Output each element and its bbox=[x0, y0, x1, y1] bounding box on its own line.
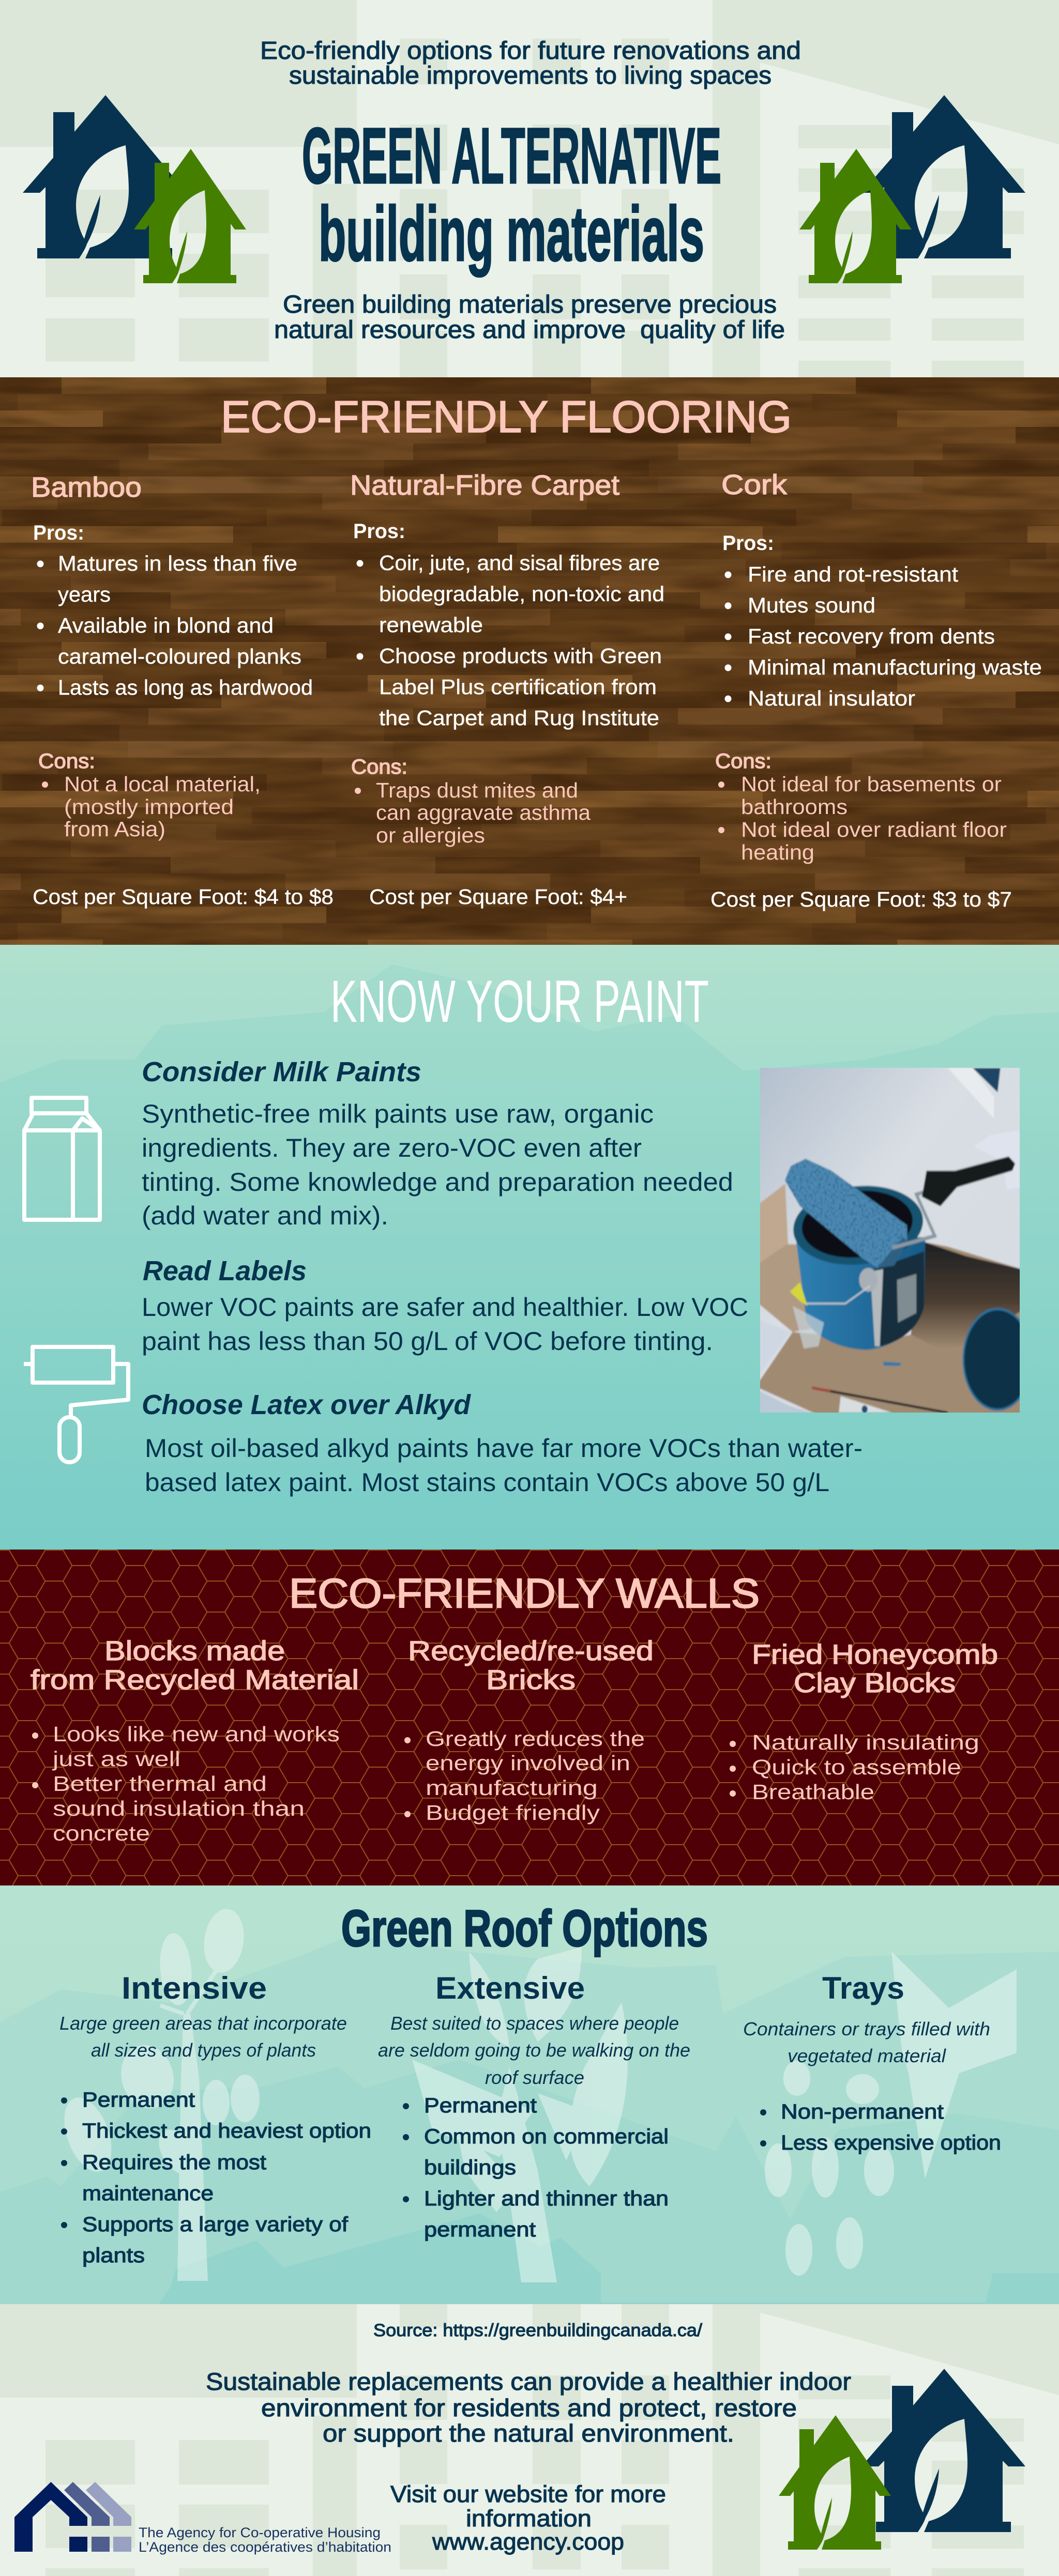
column: cork: Pros: bbox=[722, 532, 774, 555]
column: bamboo: Cost per Square Foot: $4 to $8 bbox=[33, 885, 334, 909]
column: bamboo: (mostly imported bbox=[64, 795, 234, 819]
column: extensive: buildings bbox=[424, 2156, 516, 2179]
block: read labels: Read Labels bbox=[143, 1255, 307, 1286]
panel: paint bbox=[0, 945, 1059, 1550]
column: cork: bathrooms bbox=[741, 795, 848, 819]
block: milk paints: tinting. Some knowledge and preparation needed bbox=[142, 1168, 733, 1197]
column: recycled blocks: concrete bbox=[53, 1821, 150, 1845]
column: natural-fibre carpet: Label Plus certification from bbox=[379, 675, 657, 699]
website call to action: www.agency.coop bbox=[432, 2528, 624, 2555]
column: extensive: Best suited to spaces where people bbox=[390, 2013, 679, 2034]
panel: header bbox=[0, 0, 1059, 377]
closing statement: or support the natural environment. bbox=[323, 2419, 734, 2447]
column: recycled blocks: just as well bbox=[52, 1747, 180, 1771]
website call to action bbox=[390, 2481, 666, 2555]
panel: flooring bbox=[0, 377, 1059, 945]
column: trays: vegetated material bbox=[788, 2045, 946, 2066]
block: read labels: Lower VOC paints are safer and healthier. Low VOC bbox=[142, 1293, 748, 1322]
source line: Source: https://greenbuildingcanada.ca/ bbox=[373, 2321, 703, 2340]
column: recycled bricks bbox=[404, 1636, 654, 1824]
logo: agency for co-operative housing: The Agency for Co-operative Housing bbox=[139, 2525, 381, 2540]
website call to action: information bbox=[466, 2505, 592, 2532]
column: trays bbox=[743, 1971, 1001, 2154]
column: honeycomb clay blocks: Naturally insulating bbox=[752, 1730, 979, 1754]
column: natural-fibre carpet bbox=[350, 470, 664, 909]
column: cork: Not ideal over radiant floor bbox=[741, 818, 1007, 841]
column: recycled blocks: Blocks made bbox=[104, 1636, 285, 1666]
column: cork: Not ideal for basements or bbox=[741, 772, 1002, 796]
column: cork: Mutes sound bbox=[748, 593, 875, 617]
panel: roof bbox=[0, 1885, 1059, 2304]
subtitle bbox=[274, 291, 785, 344]
column: cork: Natural insulator bbox=[748, 686, 915, 710]
column: intensive: Supports a large variety of bbox=[82, 2213, 349, 2236]
heading: paint: KNOW YOUR PAINT bbox=[330, 969, 709, 1035]
column: recycled bricks: Bricks bbox=[486, 1665, 576, 1695]
subtitle: Green building materials preserve precious bbox=[283, 291, 777, 318]
logo: agency for co-operative housing bbox=[14, 2482, 391, 2555]
column: intensive: Thickest and heaviest option bbox=[82, 2120, 371, 2142]
title: building materials bbox=[319, 190, 704, 277]
column: intensive: Permanent bbox=[82, 2089, 195, 2111]
column: honeycomb clay blocks: Quick to assemble bbox=[752, 1755, 961, 1779]
column: intensive: Requires the most bbox=[82, 2151, 266, 2174]
column: natural-fibre carpet: Pros: bbox=[353, 520, 405, 543]
column: natural-fibre carpet: renewable bbox=[379, 613, 483, 637]
column: extensive: are seldom going to be walking on the bbox=[378, 2040, 690, 2061]
block: latex over alkyd: Most oil-based alkyd paints have far more VOCs than water- bbox=[145, 1434, 863, 1463]
column: intensive: all sizes and types of plants bbox=[91, 2040, 316, 2061]
heading: roof: Green Roof Options bbox=[341, 1899, 708, 1957]
closing statement bbox=[206, 2368, 851, 2447]
column: intensive bbox=[59, 1971, 371, 2267]
column: natural-fibre carpet: biodegradable, non-toxic and bbox=[379, 582, 664, 606]
column: recycled blocks: sound insulation than bbox=[53, 1797, 305, 1820]
panel: walls bbox=[0, 1550, 1059, 1885]
column: bamboo: caramel-coloured planks bbox=[58, 645, 301, 668]
column: cork: Cork bbox=[721, 469, 788, 500]
subtitle: natural resources and improve quality of life bbox=[274, 316, 785, 344]
heading: walls: ECO-FRIENDLY WALLS bbox=[289, 1570, 760, 1616]
intro text bbox=[260, 37, 801, 89]
plant: extensive bbox=[412, 1947, 628, 2282]
title bbox=[302, 112, 721, 277]
icon: houses right bbox=[799, 95, 1025, 283]
column: natural-fibre carpet: Choose products with Green bbox=[379, 644, 662, 668]
column: recycled bricks: Greatly reduces the bbox=[426, 1727, 645, 1751]
column: honeycomb clay blocks bbox=[730, 1639, 998, 1804]
column: natural-fibre carpet: Coir, jute, and sisal fibres are bbox=[379, 551, 660, 575]
block: latex over alkyd bbox=[142, 1389, 863, 1497]
column: cork: Fire and rot-resistant bbox=[748, 562, 959, 586]
column: natural-fibre carpet: or allergies bbox=[376, 823, 485, 847]
block: read labels bbox=[142, 1255, 748, 1356]
column: bamboo: Pros: bbox=[33, 522, 84, 544]
column: natural-fibre carpet: Cons: bbox=[351, 756, 407, 778]
plant: intensive bbox=[55, 1906, 260, 2281]
column: bamboo: from Asia) bbox=[64, 817, 165, 841]
icon: houses footer bbox=[779, 2369, 1025, 2550]
column: honeycomb clay blocks: Breathable bbox=[752, 1780, 874, 1804]
column: bamboo: Not a local material, bbox=[64, 772, 261, 796]
panel: footer bbox=[0, 2304, 1059, 2576]
column: natural-fibre carpet: Natural-Fibre Carpet bbox=[350, 470, 619, 501]
column: bamboo: Lasts as long as hardwood bbox=[58, 676, 313, 699]
column: bamboo bbox=[31, 472, 334, 909]
column: cork: Cons: bbox=[715, 750, 771, 773]
column: recycled blocks: from Recycled Material bbox=[31, 1665, 359, 1695]
column: cork: Cost per Square Foot: $3 to $7 bbox=[710, 887, 1012, 911]
column: honeycomb clay blocks: Clay Blocks bbox=[794, 1668, 956, 1698]
column: cork bbox=[710, 469, 1042, 911]
column: extensive: Permanent bbox=[424, 2094, 537, 2117]
closing statement: environment for residents and protect, restore bbox=[261, 2394, 797, 2421]
column: natural-fibre carpet: can aggravate asthma bbox=[376, 801, 591, 824]
column: recycled blocks: Looks like new and works bbox=[53, 1722, 340, 1746]
block: read labels: paint has less than 50 g/L of VOC before tinting. bbox=[142, 1327, 713, 1356]
column: intensive: maintenance bbox=[82, 2182, 214, 2205]
column: bamboo: Cons: bbox=[38, 750, 95, 773]
column: bamboo: years bbox=[58, 582, 111, 606]
column: trays: Trays bbox=[822, 1971, 904, 2005]
column: honeycomb clay blocks: Fried Honeycomb bbox=[752, 1639, 998, 1670]
column: intensive: Large green areas that incorporate bbox=[59, 2013, 347, 2034]
block: milk paints: ingredients. They are zero-VOC even after bbox=[142, 1133, 642, 1162]
icon: paint roller bbox=[24, 1347, 128, 1462]
column: recycled bricks: manufacturing bbox=[426, 1776, 598, 1800]
block: milk paints: (add water and mix). bbox=[142, 1201, 388, 1230]
column: cork: heating bbox=[741, 840, 814, 864]
column: recycled blocks: Better thermal and bbox=[53, 1772, 267, 1796]
column: extensive bbox=[378, 1971, 690, 2241]
column: bamboo: Available in blond and bbox=[58, 614, 274, 637]
column: trays: Containers or trays filled with bbox=[743, 2018, 990, 2040]
column: bamboo: Matures in less than five bbox=[58, 551, 297, 575]
closing statement: Sustainable replacements can provide a healthier indoor bbox=[206, 2368, 851, 2395]
intro text: Eco-friendly options for future renovations and bbox=[260, 37, 801, 65]
plant: trays bbox=[765, 1952, 1017, 2276]
column: intensive: Intensive bbox=[122, 1971, 267, 2005]
column: extensive: Extensive bbox=[435, 1971, 585, 2005]
column: bamboo: Bamboo bbox=[31, 472, 142, 503]
column: intensive: plants bbox=[82, 2244, 145, 2267]
photo: paint can and roller bbox=[760, 1068, 1020, 1413]
column: cork: Fast recovery from dents bbox=[748, 624, 995, 648]
block: milk paints bbox=[142, 1056, 733, 1230]
column: extensive: roof surface bbox=[485, 2067, 584, 2088]
intro text: sustainable improvements to living spaces bbox=[289, 62, 771, 89]
column: recycled bricks: Recycled/re-used bbox=[408, 1636, 654, 1666]
heading: flooring: ECO-FRIENDLY FLOORING bbox=[221, 392, 792, 442]
column: trays: Less expensive option bbox=[781, 2132, 1001, 2154]
column: recycled bricks: energy involved in bbox=[426, 1751, 630, 1775]
icon: milk carton bbox=[24, 1098, 100, 1220]
block: milk paints: Synthetic-free milk paints use raw, organic bbox=[142, 1099, 654, 1128]
column: cork: Minimal manufacturing waste bbox=[748, 655, 1042, 679]
column: natural-fibre carpet: Cost per Square Foot: $4+ bbox=[369, 885, 627, 909]
column: extensive: permanent bbox=[424, 2218, 536, 2241]
column: recycled blocks bbox=[31, 1636, 359, 1845]
block: milk paints: Consider Milk Paints bbox=[142, 1056, 421, 1087]
column: natural-fibre carpet: Traps dust mites and bbox=[376, 778, 578, 802]
website call to action: Visit our website for more bbox=[390, 2481, 666, 2507]
column: natural-fibre carpet: the Carpet and Rug Institute bbox=[379, 706, 659, 730]
column: trays: Non-permanent bbox=[781, 2100, 944, 2123]
icon: houses left bbox=[23, 95, 246, 283]
block: latex over alkyd: Choose Latex over Alkyd bbox=[142, 1389, 471, 1420]
column: extensive: Lighter and thinner than bbox=[424, 2187, 669, 2210]
block: latex over alkyd: based latex paint. Most stains contain VOCs above 50 g/L bbox=[145, 1468, 829, 1497]
column: extensive: Common on commercial bbox=[424, 2125, 669, 2148]
column: recycled bricks: Budget friendly bbox=[426, 1801, 600, 1824]
logo: agency for co-operative housing: L’Agence des coopératives d’habitation bbox=[139, 2539, 391, 2555]
